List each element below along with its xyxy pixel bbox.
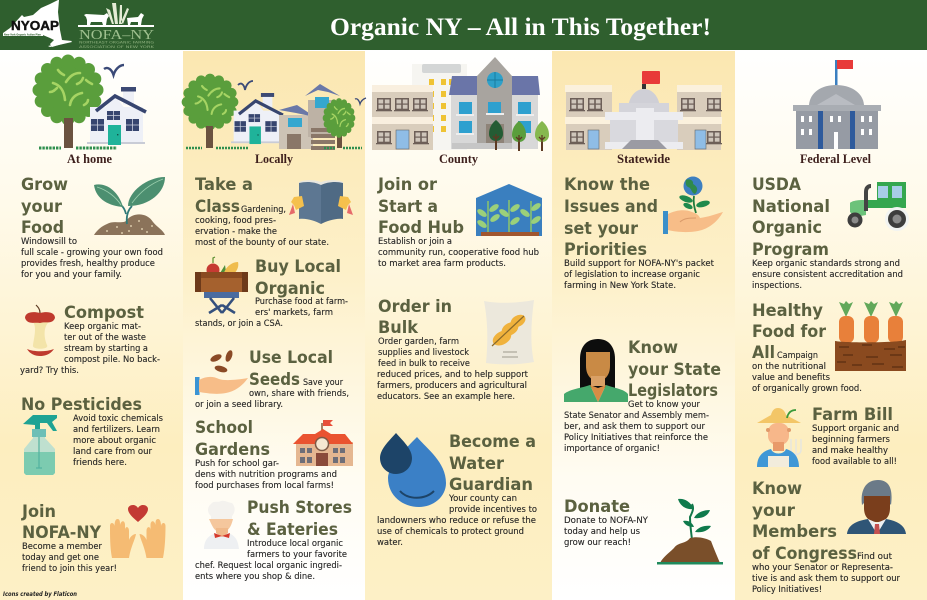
- block: School Gardens: School: [195, 418, 253, 438]
- block: Know your Members of Congress: Know: [752, 479, 802, 499]
- block: Become a Water Guardian: landowners who reduce or refuse the: [377, 516, 536, 526]
- block: Buy Local Organic: Purchase food at farm-: [255, 297, 348, 307]
- logo: NYOAP: [3, 0, 72, 47]
- logo: NOFA-NY: NOFA–NY: [79, 28, 154, 43]
- block: No Pesticides: Avoid toxic chemicals: [73, 414, 163, 424]
- logo: NOFA-NY: NORTHEAST ORGANIC FARMING: [79, 40, 154, 44]
- block: Donate: grow our reach!: [564, 538, 631, 548]
- column: Statewide: [564, 71, 723, 564]
- block: USDA National Organic Program: [752, 175, 909, 291]
- block: Use Local Seeds: own, share with friends,: [249, 389, 349, 399]
- icon: heart and hands: [110, 505, 166, 558]
- icon: feed bag: [484, 300, 534, 364]
- icon: carrots in soil: [835, 301, 906, 371]
- block: Know your Members of Congress: of Congress: [752, 544, 857, 564]
- header banner: [0, 0, 927, 50]
- block: Compost: Keep organic mat-: [64, 322, 141, 332]
- block: Join NOFA-NY: friend to join this year!: [22, 564, 117, 574]
- block: Know your Members of Congress: Policy Initiatives!: [752, 585, 822, 595]
- block: Buy Local Organic: Buy Local: [255, 257, 341, 277]
- block: Grow your Food: [21, 175, 165, 280]
- icon: spray bottle: [23, 415, 57, 475]
- block: USDA National Organic Program: Keep organic standards strong and: [752, 259, 900, 269]
- block: Take a Class: cooking, food pres-: [195, 216, 276, 226]
- block: Donate: [564, 497, 723, 564]
- icon: produce crate on table: [195, 257, 248, 313]
- block: Buy Local Organic: [195, 257, 348, 329]
- icon: congressman: [847, 480, 906, 534]
- block: Compost: [20, 303, 160, 376]
- label: Federal Level: Federal Level: [800, 152, 871, 166]
- block: USDA National Organic Program: inspections.: [752, 281, 802, 291]
- block: Know your State Legislators: Legislators: [628, 381, 718, 401]
- logo: NYOAP: NYOAP: [11, 19, 59, 33]
- block: Know the Issues: Priorities: [564, 240, 647, 260]
- block: Know your Members of Congress: [752, 479, 906, 595]
- block: Use Local Seeds: Save your: [303, 378, 343, 388]
- label: County: County: [439, 152, 479, 166]
- block: Join or Start a Food Hub: Join or: [377, 175, 438, 195]
- block: Take a Class: Class: [195, 197, 240, 217]
- block: Buy Local Organic: ers' markets, farm: [255, 308, 333, 318]
- block: Know your State Legislators: State Senator and Assembly mem-: [564, 411, 709, 421]
- block: Compost: yard? Try this.: [20, 366, 79, 376]
- block: USDA National Organic Program: USDA: [752, 175, 802, 195]
- block: Become a Water Guardian: Water: [449, 454, 505, 474]
- block: Healthy Food for All: Campaign: [777, 351, 818, 361]
- block: No Pesticides: and fertilizers. Learn: [73, 425, 160, 435]
- block: Use Local Seeds: or join a seed library.: [195, 400, 283, 410]
- block: Know the Issues: farming in New York State.: [564, 281, 676, 291]
- block: Donate: today and help us: [564, 527, 640, 537]
- block: School Gardens: Gardens: [195, 440, 270, 460]
- block: Know your Members of Congress: your: [752, 501, 796, 521]
- block: Grow your Food: your: [21, 197, 63, 217]
- icon: apple core: [25, 305, 55, 356]
- block: Become a Water Guardian: Your county can: [448, 494, 517, 504]
- block: Donate: Donate to NOFA-NY: [564, 516, 648, 526]
- block: USDA National Organic Program: National: [752, 197, 830, 217]
- block: No Pesticides: more about organic: [73, 436, 156, 446]
- block: USDA National Organic Program: ensure consistent accreditation and: [752, 270, 903, 280]
- block: Order in Bulk: educators. See an example here.: [377, 392, 515, 402]
- block: Become a Water Guardian: Become a: [449, 432, 536, 452]
- block: Take a Class: [195, 175, 353, 248]
- block: Push Stores & Eateries: chef. Request local organic ingredi-: [195, 561, 342, 571]
- block: School Gardens: dens with nutrition programs and: [195, 470, 337, 480]
- icon: seedling: [94, 177, 165, 235]
- block: Healthy Food for All: [752, 301, 906, 394]
- block: Become a Water Guardian: Guardian: [449, 475, 533, 495]
- icon: school building: [293, 420, 353, 466]
- block: Grow your Food: Grow: [21, 175, 68, 195]
- block: Know your State Legislators: Get to know your: [628, 400, 700, 410]
- block: Know your State Legislators: ber, and ask them to support our: [564, 422, 705, 432]
- block: Order in Bulk: Bulk: [378, 318, 419, 338]
- block: Healthy Food for All: Healthy: [752, 301, 823, 321]
- block: USDA National Organic Program: Organic: [752, 218, 822, 238]
- title: Organic NY – All in This Together!: [330, 14, 711, 41]
- block: Grow your Food: provides fresh, healthy produce: [21, 259, 155, 269]
- label: Locally: Locally: [255, 152, 294, 166]
- icon: water drops: [380, 433, 446, 507]
- block: Farm Bill: Support organic and: [812, 424, 899, 434]
- block: Push Stores & Eateries: Introduce local organic: [247, 539, 343, 549]
- block: Grow your Food: for you and your family.: [21, 270, 122, 280]
- block: Farm Bill: Farm Bill: [812, 405, 893, 425]
- icon: woman legislator: [564, 339, 628, 402]
- block: Know your State Legislators: importance of organic!: [564, 444, 660, 454]
- block: Join or Start a Food Hub: Start a: [378, 197, 438, 217]
- block: Grow your Food: Windowsill to: [21, 237, 77, 247]
- block: Know the Issues: Build support for NOFA-NY's packet: [564, 259, 714, 269]
- block: Healthy Food for All: value and benefits: [752, 373, 830, 383]
- block: Know your Members of Congress: who your Senator or Representa-: [752, 563, 893, 573]
- block: Know your State Legislators: Policy Initiatives that reinforce the: [564, 433, 708, 443]
- block: Join or Start a Food Hub: to market area farm products.: [378, 259, 506, 269]
- block: Know your Members of Congress: tive is and ask them to support our: [752, 574, 900, 584]
- block: Join or Start a Food Hub: [377, 175, 542, 269]
- column: Federal Level: [752, 60, 909, 595]
- column: Locally: [182, 74, 366, 582]
- block: Become a Water Guardian: provide incentives to: [449, 505, 537, 515]
- block: Order in Bulk: Order garden, farm: [378, 337, 459, 347]
- block: Compost: Compost: [64, 303, 144, 323]
- block: Order in Bulk: supplies and livestock: [378, 348, 470, 358]
- column: County: [372, 57, 549, 548]
- block: Order in Bulk: [377, 297, 534, 402]
- block: Know the Issues: set your: [564, 219, 639, 239]
- block: Become a Water Guardian: water.: [377, 538, 403, 548]
- icon: federal capitol: [793, 60, 881, 149]
- panel: county column background: [365, 50, 552, 600]
- block: Push Stores & Eateries: & Eateries: [247, 520, 338, 540]
- block: Know your State Legislators: Know: [628, 338, 678, 358]
- block: Buy Local Organic: stands, or join a CSA.: [195, 319, 283, 329]
- logo: NYOAP: New York Organic Action Plan: [4, 32, 41, 36]
- block: Grow your Food: full scale - growing your own food: [21, 248, 163, 258]
- block: Compost: compost pile. No back-: [64, 355, 160, 365]
- block: Healthy Food for All: All: [752, 343, 775, 363]
- block: Take a Class: most of the bounty of our state.: [195, 238, 329, 248]
- block: Take a Class: Take a: [195, 175, 253, 195]
- block: Healthy Food for All: Food for: [752, 322, 827, 342]
- credit: Icons created by Flaticon: [3, 590, 77, 598]
- block: Push Stores & Eateries: Push Stores: [247, 498, 352, 518]
- block: Use Local Seeds: Seeds: [249, 370, 300, 390]
- icon: neighborhood: [182, 74, 366, 150]
- block: Know your Members of Congress: Members: [752, 522, 837, 542]
- block: Push Stores & Eateries: ents where you shop & dine.: [195, 572, 315, 582]
- block: Join or Start a Food Hub: Food Hub: [378, 218, 464, 238]
- block: Farm Bill: food available to all!: [812, 457, 897, 467]
- label: Statewide: Statewide: [617, 152, 670, 166]
- icon: hand holding globe plant: [663, 176, 723, 234]
- block: Healthy Food for All: of organically grown food.: [752, 384, 862, 394]
- block: Farm Bill: and make healthy: [812, 446, 889, 456]
- block: Push Stores & Eateries: [195, 498, 352, 582]
- block: Become a Water Guardian: [377, 432, 537, 548]
- block: Join NOFA-NY: today and get one: [22, 553, 99, 563]
- block: Order in Bulk: feed in bulk to receive: [378, 359, 470, 369]
- block: Order in Bulk: Order in: [378, 297, 452, 317]
- block: Know the Issues: of legislation to increase organic: [564, 270, 700, 280]
- block: USDA National Organic Program: Program: [752, 240, 829, 260]
- icon: county buildings: [372, 57, 549, 151]
- panel: locally column background: [183, 51, 365, 600]
- block: Farm Bill: beginning farmers: [812, 435, 890, 445]
- icon: tractor: [848, 182, 909, 231]
- block: Compost: ter out of the waste: [64, 333, 146, 343]
- block: Order in Bulk: reduced prices, and to help support: [377, 370, 528, 380]
- panel: statewide column background: [552, 51, 735, 600]
- block: Join NOFA-NY: [21, 502, 166, 574]
- block: Know your State Legislators: your State: [628, 360, 721, 380]
- icon: plant in soil: [657, 499, 723, 564]
- panel: at home column background: [0, 50, 183, 600]
- block: Join NOFA-NY: Join: [21, 502, 56, 522]
- block: Buy Local Organic: Organic: [255, 279, 325, 299]
- block: Farm Bill: [757, 405, 899, 467]
- block: Know the Issues: Know the: [564, 175, 650, 195]
- block: Know your State Legislators: [564, 338, 721, 454]
- block: Join NOFA-NY: NOFA-NY: [22, 523, 102, 543]
- block: No Pesticides: [21, 395, 163, 475]
- block: Take a Class: ervation - make the: [195, 227, 277, 237]
- logo: NOFA-NY: ASSOCIATION OF NEW YORK: [79, 44, 155, 49]
- block: No Pesticides: No Pesticides: [21, 395, 142, 415]
- block: School Gardens: Push for school gar-: [195, 459, 279, 469]
- block: Grow your Food: Food: [21, 218, 64, 238]
- block: Take a Class: Gardening,: [241, 205, 286, 215]
- block: Join NOFA-NY: Become a member: [22, 542, 102, 552]
- block: Know the Issues: Issues and: [564, 197, 658, 217]
- label: At home: At home: [67, 152, 112, 166]
- block: School Gardens: [195, 418, 353, 491]
- icon: tree and house: [32, 54, 146, 148]
- panel: federal column background: [735, 50, 927, 600]
- block: Donate: Donate: [564, 497, 630, 517]
- block: Push Stores & Eateries: farmers to your favorite: [247, 550, 347, 560]
- logo: NOFA-NY: [78, 3, 155, 49]
- block: Order in Bulk: farmers, producers and agricultural: [377, 381, 527, 391]
- block: School Gardens: food purchases from local farms!: [195, 481, 334, 491]
- icon: chef: [204, 501, 239, 549]
- block: Join or Start a Food Hub: community run, cooperative food hub: [378, 248, 539, 258]
- icon: open book: [289, 180, 353, 224]
- block: Use Local Seeds: [195, 348, 349, 410]
- icon: greenhouse: [476, 184, 542, 236]
- block: No Pesticides: land care from our: [73, 447, 152, 457]
- block: Know your Members of Congress: Find out: [857, 552, 892, 562]
- block: No Pesticides: friends here.: [73, 458, 127, 468]
- column: At home: [3, 54, 166, 598]
- block: Become a Water Guardian: use of chemicals to protect ground: [377, 527, 524, 537]
- block: Join or Start a Food Hub: Establish or join a: [378, 237, 452, 247]
- icon: hand with seeds: [195, 349, 248, 395]
- block: Know the Issues: [564, 175, 723, 291]
- icon: state capitol: [565, 71, 722, 150]
- block: Use Local Seeds: Use Local: [249, 348, 333, 368]
- block: Healthy Food for All: on the nutritional: [752, 362, 826, 372]
- icon: farmer: [757, 408, 801, 467]
- block: Compost: stream by starting a: [64, 344, 148, 354]
